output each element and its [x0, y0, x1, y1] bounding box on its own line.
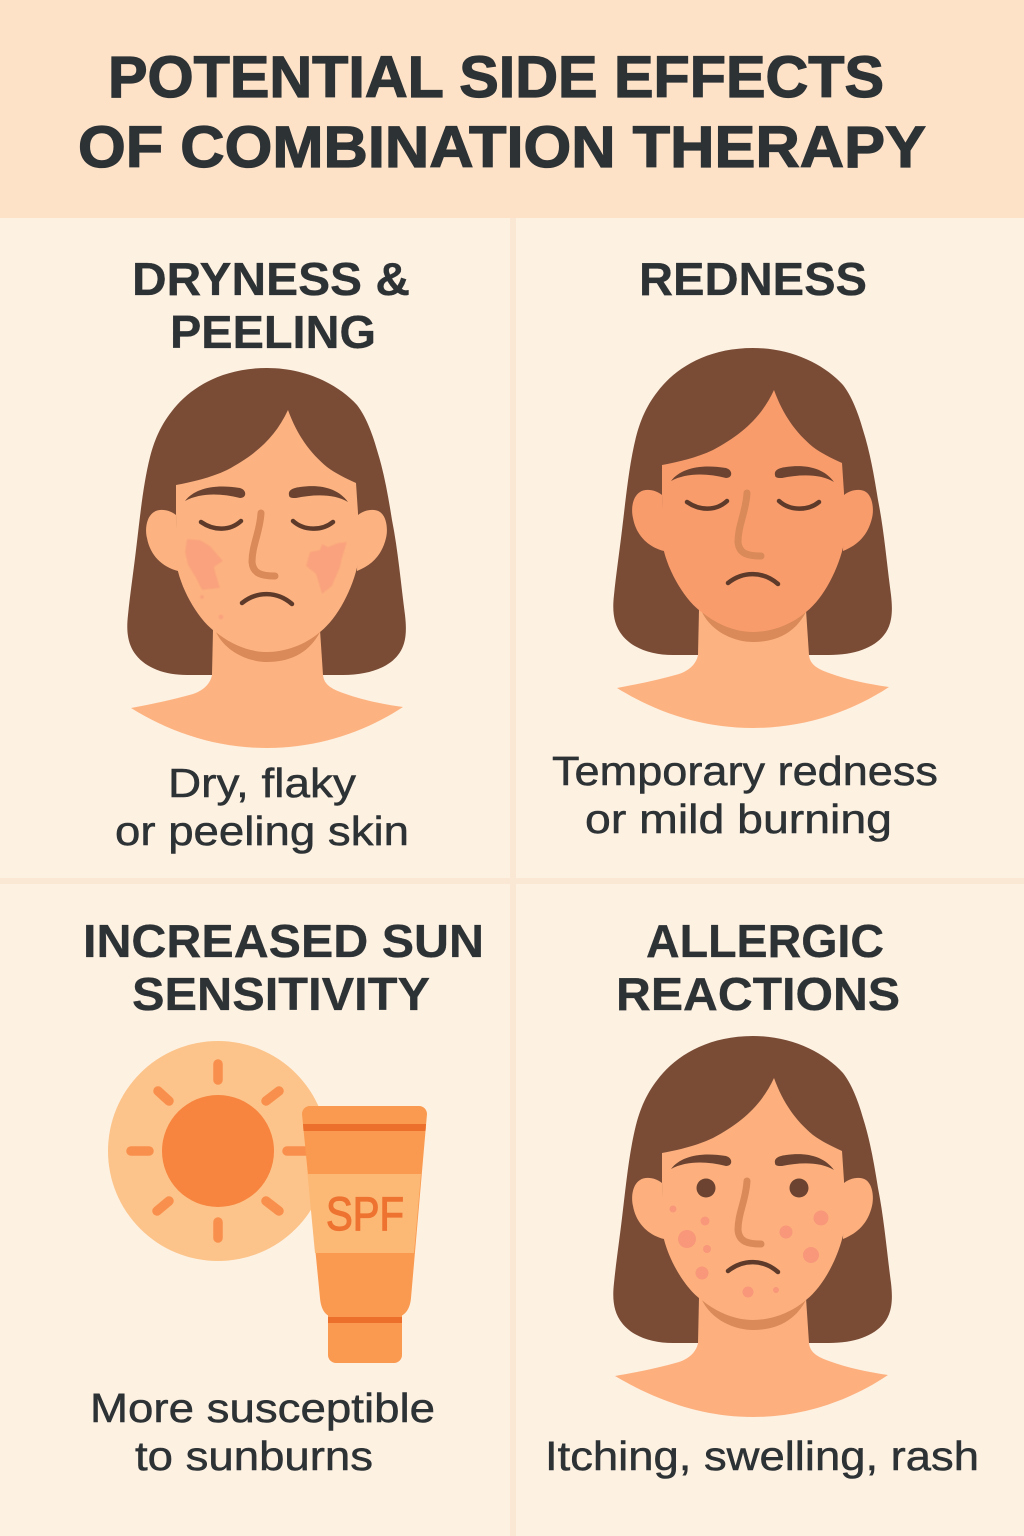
heading: allergic reactions [616, 915, 900, 1020]
illustration: face with rash [613, 1036, 892, 1417]
panel: dryness and peeling [115, 253, 410, 854]
description: dryness: or peeling skin [115, 808, 409, 854]
heading: allergic reactions: ALLERGIC [646, 915, 884, 967]
description: dryness [115, 760, 409, 854]
description: allergic reactions: Itching, swelling, rash [545, 1433, 979, 1479]
cheek patches [185, 539, 347, 620]
heading: dryness and peeling [132, 253, 410, 358]
heading: redness: REDNESS [639, 253, 867, 305]
header banner with title [0, 0, 1024, 218]
heading: sun sensitivity: SENSITIVITY [132, 968, 430, 1020]
heading: sun sensitivity [83, 915, 484, 1020]
panel: increased sun sensitivity [83, 915, 484, 1479]
description: sun sensitivity: to sunburns [135, 1433, 373, 1479]
illustration: face with redness [613, 348, 892, 728]
icon: SPF sunscreen tube [302, 1106, 427, 1363]
panel: redness [552, 253, 938, 842]
description: sun sensitivity [90, 1385, 435, 1479]
icon: sun [108, 1041, 328, 1261]
panel: allergic reactions [545, 915, 979, 1479]
description: sun sensitivity: More susceptible [90, 1385, 435, 1431]
rash spots [670, 1206, 828, 1298]
heading: allergic reactions: REACTIONS [616, 968, 900, 1020]
label: SPF: SPF [326, 1187, 404, 1240]
heading: dryness and peeling: PEELING [170, 306, 376, 358]
illustration: face with dry peeling cheeks [127, 368, 406, 748]
heading: sun sensitivity: INCREASED SUN [83, 915, 484, 967]
description: redness [552, 748, 938, 842]
heading: dryness and peeling: DRYNESS & [132, 253, 410, 305]
title line 1: POTENTIAL SIDE EFFECTS [108, 45, 884, 110]
description: redness: or mild burning [585, 796, 892, 842]
title line 2: OF COMBINATION THERAPY [78, 115, 926, 180]
description: redness: Temporary redness [552, 748, 938, 794]
description: dryness: Dry, flaky [168, 760, 357, 806]
